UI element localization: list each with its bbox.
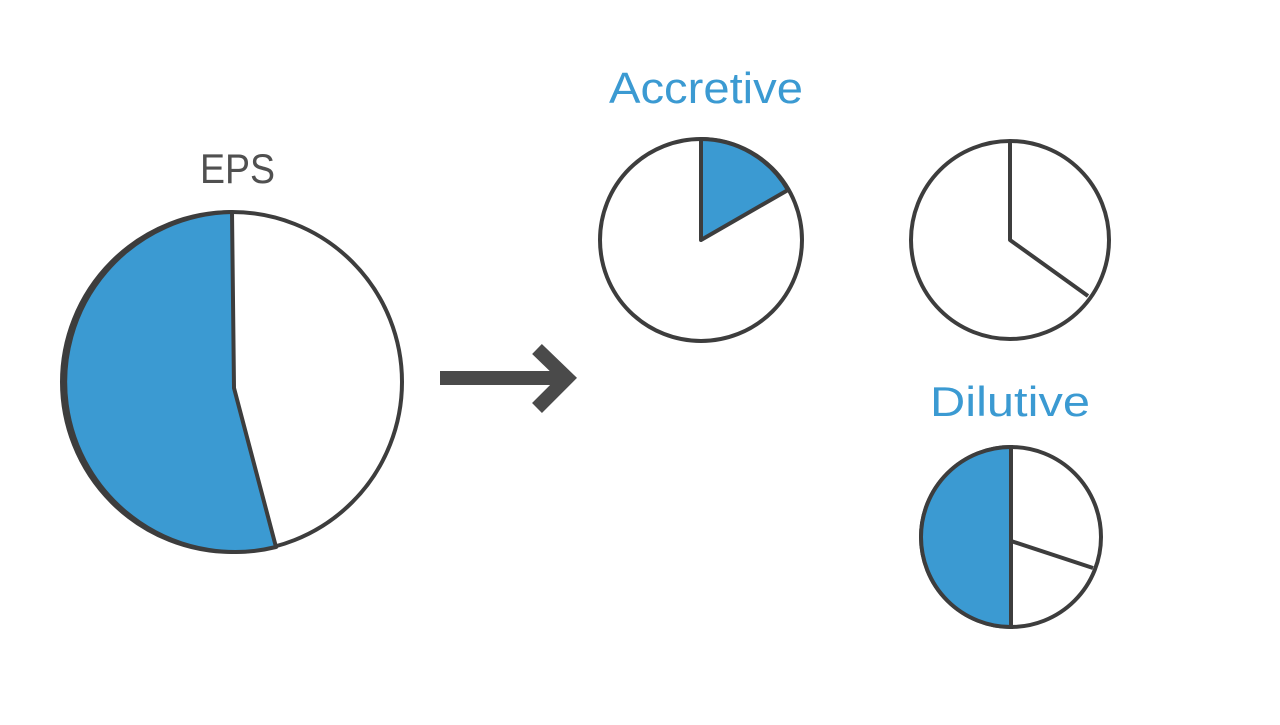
chart: right pie (no highlight) bbox=[911, 141, 1109, 339]
chart: large EPS pie bbox=[62, 212, 402, 552]
heading: Accretive: Accretive bbox=[609, 64, 803, 113]
heading: Dilutive: Dilutive bbox=[930, 378, 1090, 425]
arrow bbox=[440, 349, 567, 408]
heading: EPS: EPS bbox=[200, 145, 275, 192]
chart: dilutive pie bbox=[921, 447, 1101, 627]
chart: accretive pie bbox=[600, 139, 802, 341]
